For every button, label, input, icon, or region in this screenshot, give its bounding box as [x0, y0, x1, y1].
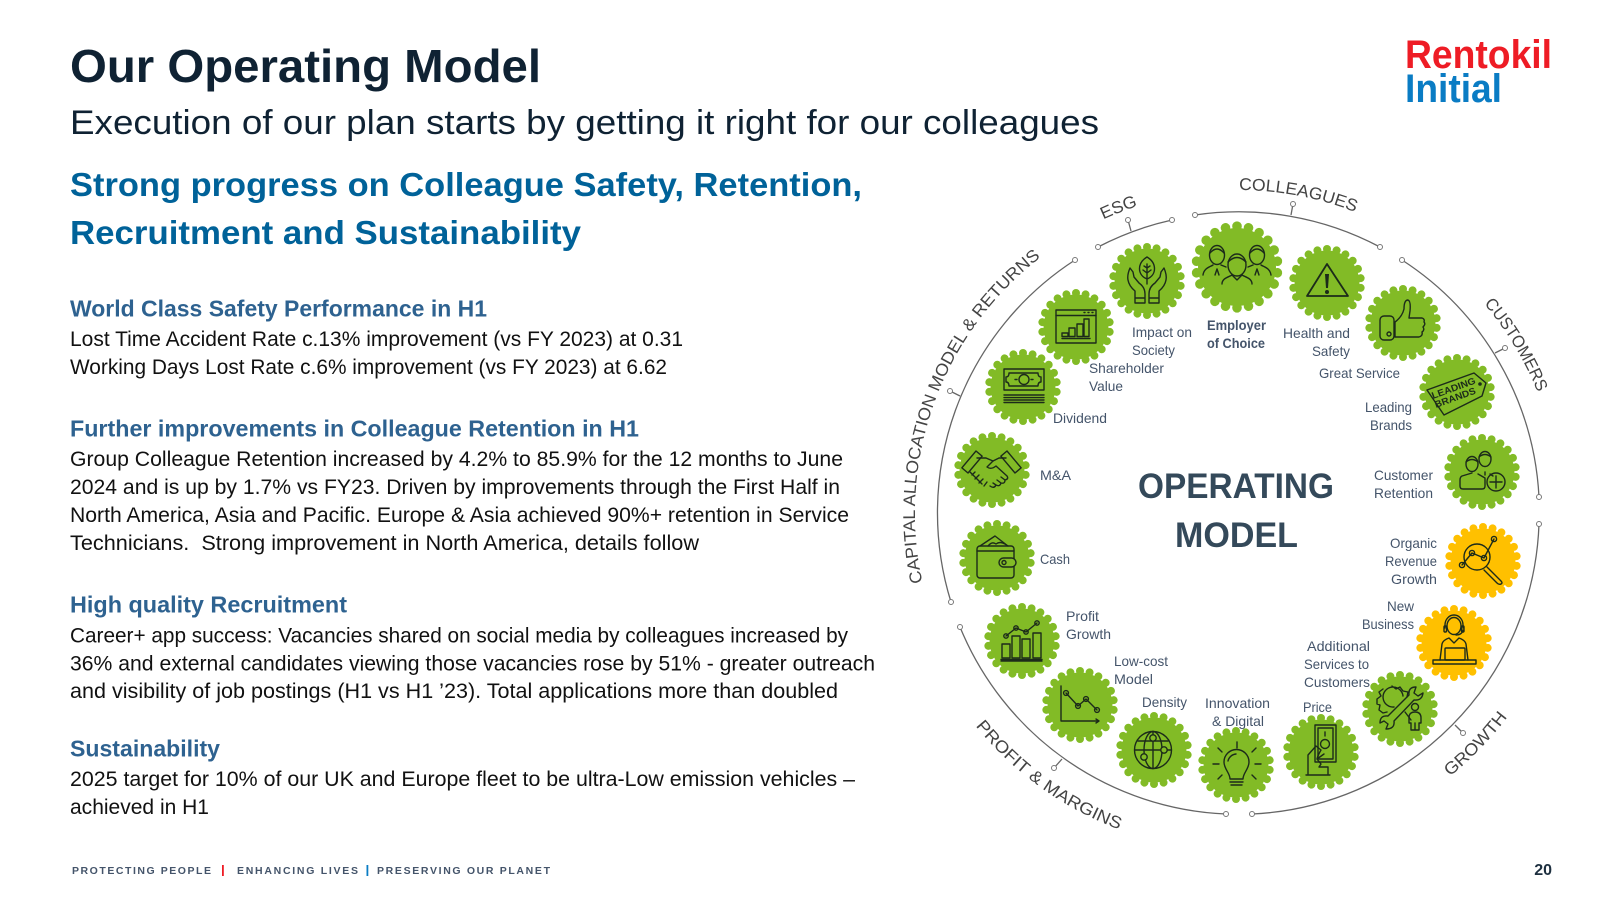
label: low-cost model: Low-cost	[1114, 653, 1168, 669]
icon: customer retention	[1444, 434, 1520, 510]
label: new business: New	[1387, 598, 1415, 614]
label: customer retention	[1374, 467, 1433, 501]
sustainability body: achieved in H1	[70, 796, 209, 819]
icon: leading brands	[1419, 354, 1495, 430]
label: impact on society: Impact on	[1132, 324, 1192, 340]
label: innovation and digital: Innovation	[1205, 695, 1270, 711]
retention body	[70, 448, 849, 555]
curved label: capital allocation: CAPITAL ALLOCATION MODEL & RETURNS	[903, 250, 1039, 583]
label: health and safety	[1283, 325, 1350, 359]
sustainability body: 2025 target for 10% of our UK and Europe fleet to be ultra-Low emission vehicles –	[70, 768, 855, 791]
curved label: customers: CUSTOMERS	[1486, 298, 1547, 391]
label: additional services: Additional	[1307, 638, 1370, 654]
label: profit growth	[1066, 608, 1111, 642]
curved label: profit and margins: PROFIT & MARGINS	[976, 720, 1122, 828]
text block: sustainability	[70, 736, 855, 819]
label: new business: Business	[1362, 616, 1414, 632]
icon: new business	[1416, 605, 1492, 681]
recruitment body: Career+ app success: Vacancies shared on social media by colleagues increased by	[70, 624, 848, 648]
icon: great service	[1365, 285, 1441, 361]
main heading	[70, 166, 862, 251]
label: leading brands	[1365, 399, 1412, 433]
icon: density	[1116, 712, 1192, 788]
label: employer of choice: of Choice	[1207, 335, 1265, 351]
main heading: Strong progress on Colleague Safety, Retention,	[70, 166, 862, 203]
icon: mergers and acquisitions	[954, 432, 1030, 508]
retention body: Group Colleague Retention increased by 4.2% to 85.9% for the 12 months to June	[70, 448, 843, 471]
label: impact on society	[1132, 324, 1192, 358]
icon: shareholder value	[1038, 289, 1114, 365]
arc: capital allocation	[937, 258, 1078, 604]
safety body: Lost Time Accident Rate c.13% improvement (vs FY 2023) at 0.31	[70, 328, 683, 351]
safety body: Working Days Lost Rate c.6% improvement (vs FY 2023) at 6.62	[70, 356, 667, 379]
label: innovation and digital	[1205, 695, 1270, 729]
diagram: operating model wheel	[903, 178, 1547, 828]
sustainability body	[70, 768, 855, 819]
icon: health and safety	[1289, 245, 1365, 321]
label: organic revenue growth: Growth	[1391, 571, 1437, 587]
arc: growth	[1250, 522, 1542, 816]
icon: additional services	[1362, 671, 1438, 747]
retention body: 2024 and is up by 1.7% vs FY23. Driven by improvements through the First Half in	[70, 476, 840, 499]
retention body: Technicians. Strong improvement in North America, details follow	[70, 532, 700, 555]
arc: profit and margins	[958, 624, 1228, 816]
section heading: sustainability: Sustainability	[70, 736, 220, 762]
icon: innovation and digital	[1198, 727, 1274, 803]
icon: impact on society	[1109, 243, 1185, 319]
icon: employer of choice	[1191, 221, 1283, 313]
label: new business	[1362, 598, 1415, 632]
label: low-cost model	[1114, 653, 1168, 687]
label: great service: Great Service	[1319, 365, 1400, 381]
arc: colleagues	[1192, 202, 1382, 250]
icon: price	[1283, 714, 1359, 790]
label: cash: Cash	[1040, 551, 1070, 567]
label: organic revenue growth: Organic	[1390, 535, 1437, 551]
centre label: OPERATING	[1138, 467, 1334, 506]
footer strapline	[72, 865, 551, 877]
icon: organic revenue growth	[1445, 523, 1521, 599]
centre label	[1138, 467, 1334, 555]
icon: leading brands: BRANDS	[1433, 386, 1477, 411]
icon: low-cost model	[1042, 667, 1118, 743]
icon: cash	[959, 520, 1035, 596]
label: impact on society: Society	[1132, 342, 1175, 358]
arc: ESG	[1096, 218, 1174, 250]
retention body: North America, Asia and Pacific. Europe & Asia achieved 90%+ retention in Service	[70, 504, 849, 527]
label: shareholder value	[1089, 360, 1164, 394]
label: dividend: Dividend	[1053, 410, 1107, 426]
icon: leading brands: LEADING	[1430, 376, 1477, 402]
icon: dividend	[985, 349, 1061, 425]
icon: profit growth	[984, 603, 1060, 679]
subtitle: Execution of our plan starts by getting it right for our colleagues	[70, 104, 1099, 142]
label: price: Price	[1303, 699, 1332, 715]
label: profit growth: Profit	[1066, 608, 1099, 624]
label: profit growth: Growth	[1066, 626, 1111, 642]
recruitment body: and visibility of job postings (H1 vs H1 ’23). Total applications more than doubled	[70, 680, 838, 703]
label: leading brands: Leading	[1365, 399, 1412, 415]
label: organic revenue growth: Revenue	[1385, 553, 1437, 569]
title: Our Operating Model	[70, 40, 541, 92]
footer strapline: ENHANCING LIVES	[237, 865, 358, 877]
curved label: growth: GROWTH	[1445, 711, 1506, 774]
label: additional services: Customers	[1304, 674, 1370, 690]
label: low-cost model: Model	[1114, 671, 1153, 687]
safety body	[70, 328, 683, 379]
label: shareholder value: Shareholder	[1089, 360, 1164, 376]
logo: Rentokil Initial: Rentokil	[1405, 33, 1552, 77]
logo: Rentokil Initial	[1405, 33, 1552, 111]
label: customer retention: Customer	[1374, 467, 1433, 483]
text block: retention	[70, 416, 849, 555]
label: leading brands: Brands	[1370, 417, 1412, 433]
label: shareholder value: Value	[1089, 378, 1123, 394]
section heading: safety: World Class Safety Performance in H1	[70, 296, 487, 322]
label: customer retention: Retention	[1374, 485, 1433, 501]
recruitment body: 36% and external candidates viewing those vacancies rose by 51% - greater outreach	[70, 652, 875, 676]
label: employer of choice: Employer	[1207, 317, 1266, 333]
text block: recruitment	[70, 592, 875, 703]
recruitment body	[70, 624, 875, 703]
section heading: recruitment: High quality Recruitment	[70, 592, 347, 618]
footer strapline: PRESERVING OUR PLANET	[377, 865, 551, 877]
logo: Rentokil Initial: Initial	[1405, 67, 1502, 111]
footer strapline: PROTECTING PEOPLE	[72, 865, 211, 877]
label: employer of choice	[1207, 317, 1266, 351]
label: health and safety: Safety	[1312, 343, 1350, 359]
label: density: Density	[1142, 694, 1187, 710]
label: additional services	[1304, 638, 1370, 690]
section heading: retention: Further improvements in Colleague Retention in H1	[70, 416, 639, 442]
label: innovation and digital: & Digital	[1212, 713, 1264, 729]
label: M&A: M&A	[1040, 467, 1072, 483]
main heading: Recruitment and Sustainability	[70, 214, 582, 251]
label: organic revenue growth	[1385, 535, 1437, 587]
label: additional services: Services to	[1304, 656, 1369, 672]
label: health and safety: Health and	[1283, 325, 1350, 341]
text block: safety	[70, 296, 683, 379]
curved label: colleagues: COLLEAGUES	[1240, 178, 1358, 211]
centre label: MODEL	[1175, 516, 1298, 555]
arc: customers	[1400, 258, 1542, 500]
page number: 20	[1534, 862, 1552, 879]
curved label: ESG: ESG	[1100, 196, 1136, 219]
